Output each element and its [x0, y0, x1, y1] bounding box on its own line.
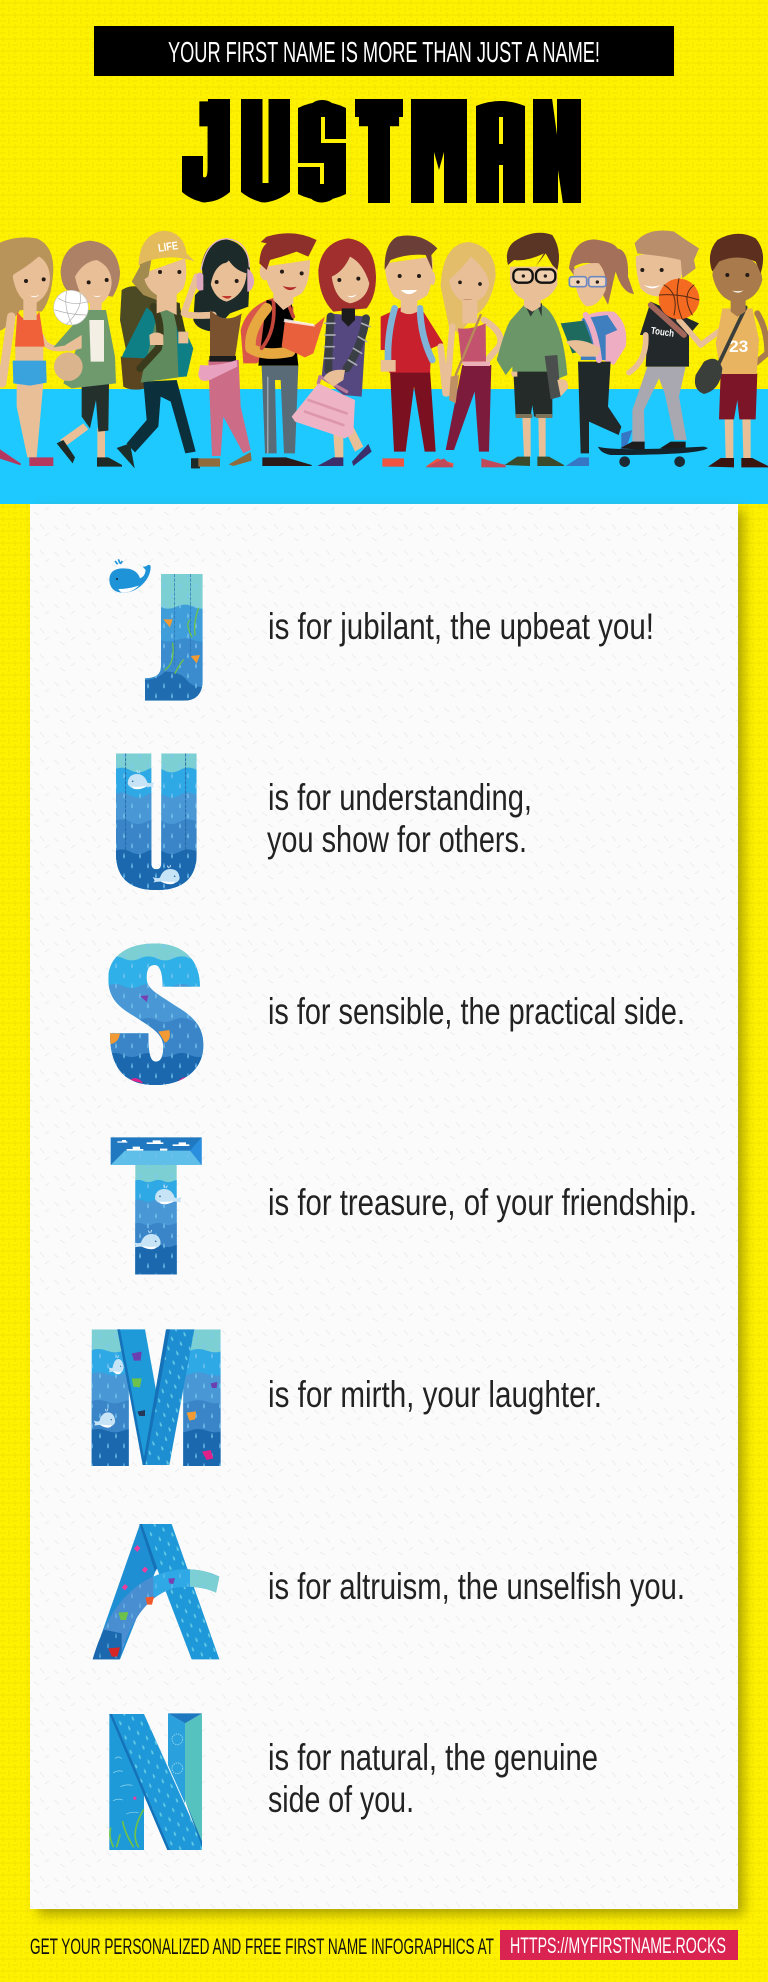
icon: whale: [153, 865, 180, 884]
title: JUSTMAN: A: [481, 80, 520, 225]
title: JUSTMAN: N: [535, 79, 579, 224]
text: J: is for jubilant, the upbeat you!: [268, 606, 654, 647]
illustration: group of people, right half: [381, 231, 768, 467]
person: girl in green jacket with volleyball: [53, 241, 122, 467]
letter S artwork: [107, 940, 207, 1087]
row: letter S: [107, 940, 685, 1087]
person: girl with red hair, pink handbag: [292, 238, 376, 466]
footer call to action: GET YOUR PERSONALIZED AND FREE FIRST NAME INFOGRAPHICS AT: [30, 1934, 494, 1959]
text: U: you show for others.: [267, 819, 527, 860]
icon: whale: [94, 1408, 115, 1428]
illustration: floor band: [0, 389, 768, 504]
person: blonde girl: [426, 242, 506, 467]
row: letter M: [90, 1327, 602, 1468]
person: skater with basketball: [598, 231, 721, 467]
illustration: group of people, left half: [0, 231, 376, 468]
letter J artwork: [109, 559, 203, 701]
text: N: is for natural, the genuine: [268, 1737, 598, 1778]
title: JUSTMAN: T: [361, 79, 397, 224]
main panel shadow: [38, 510, 744, 1915]
icon: whale: [155, 1185, 182, 1204]
top banner: [94, 26, 674, 76]
icon: whale: [109, 559, 151, 593]
text: M: is for mirth, your laughter.: [268, 1374, 602, 1415]
icon: whale: [128, 770, 155, 789]
person: hiker with cap and backpack: [117, 231, 200, 468]
icon: whale: [109, 1355, 123, 1374]
letter U artwork: [116, 753, 197, 890]
text: U: is for understanding,: [268, 777, 532, 818]
row: letter U: [113, 750, 532, 893]
letter N artwork: [109, 1713, 202, 1850]
person: man in basketball tank top: 23: [729, 337, 748, 356]
person: man with glasses and green sweater: [497, 233, 568, 466]
person: girl in orange top: [0, 237, 78, 466]
title: JUSTMAN: U: [243, 79, 287, 224]
person: man in red tee: [381, 236, 453, 467]
letter A artwork: [90, 1524, 223, 1663]
title: JUSTMAN: [182, 79, 581, 225]
main panel: [30, 504, 738, 1909]
person: man in basketball tank top: [695, 234, 768, 467]
person: girl with ponytail and tablet: [561, 239, 634, 466]
title: JUSTMAN: J: [189, 79, 223, 224]
person: skater with basketball: Touch: [650, 326, 675, 340]
row: letter A: [90, 1524, 685, 1663]
row: letter N: [109, 1713, 598, 1850]
title: JUSTMAN: M: [414, 79, 464, 224]
person: hiker with cap and backpack: LIFE: [157, 240, 179, 255]
letter M artwork: [90, 1327, 223, 1468]
person: girl with pink headphones: [184, 239, 254, 468]
letter T artwork: [111, 1137, 202, 1277]
row: letter T: [111, 1137, 697, 1277]
row: letter J: [109, 559, 654, 707]
title: JUSTMAN: S: [302, 79, 342, 224]
person: man with red hair holding a book: [241, 233, 325, 466]
icon: whale: [134, 1230, 161, 1249]
text: N: side of you.: [268, 1779, 414, 1820]
